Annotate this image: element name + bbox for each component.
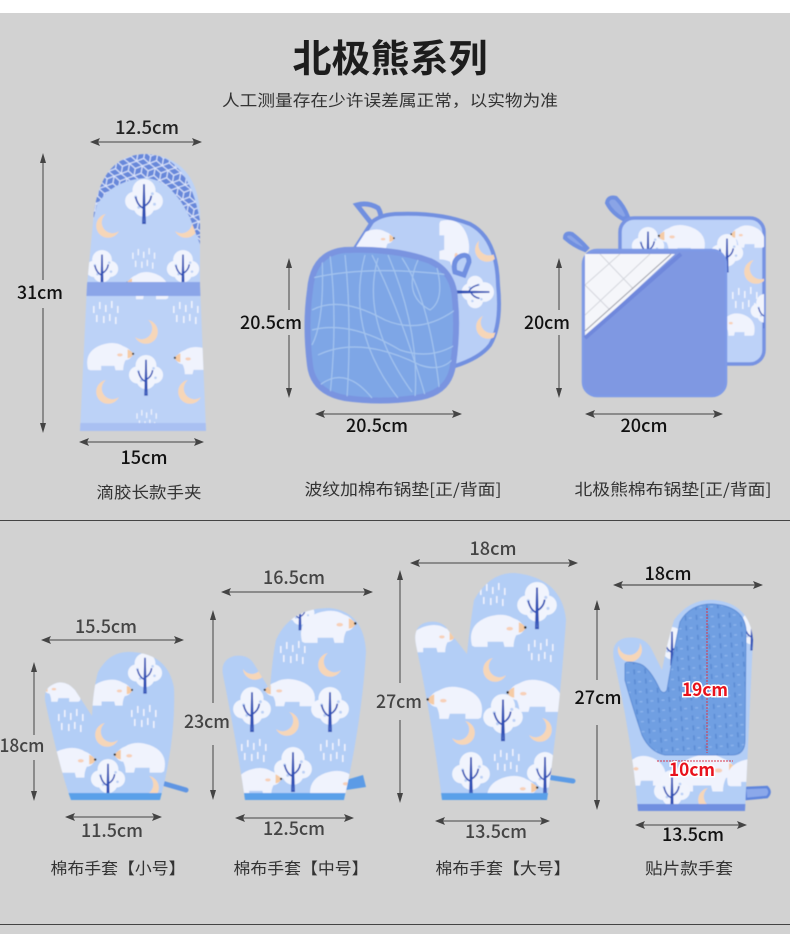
dimension: large glove height: 27cm — [376, 688, 422, 714]
icon: medium glove loop — [346, 775, 366, 790]
icon: back cotton potholder — [607, 198, 779, 364]
dimension: long mitt bottom width: 15cm — [120, 444, 168, 470]
panel: long oven mitt — [80, 153, 206, 432]
dimension: medium glove height — [184, 610, 230, 800]
dimension: patch glove height: 27cm — [574, 684, 622, 710]
dimension: wave pad height — [240, 258, 302, 398]
dimension: medium glove bottom width — [236, 815, 353, 841]
dimension: cotton pad width: 20cm — [620, 412, 668, 438]
dimension: small glove bottom width — [66, 817, 161, 843]
dimension: wave pad width: 20.5cm — [346, 412, 408, 438]
panel: wave potholders — [308, 204, 502, 400]
dimension: cotton pad height: 20cm — [524, 309, 570, 335]
panel: large glove — [408, 570, 573, 806]
panel: small glove — [40, 648, 186, 804]
caption: wave pad: 波纹加棉布锅垫[正/背面] — [304, 476, 502, 500]
label: 10cm red: 10cm — [669, 756, 715, 782]
divider line middle — [0, 520, 790, 521]
dimension: patch glove bottom width — [636, 821, 746, 847]
dimension: medium glove bottom width: 12.5cm — [263, 815, 325, 841]
dimension: long mitt bottom width — [80, 442, 203, 470]
icon: front silicone potholder — [308, 250, 456, 400]
dimension: large glove height — [376, 570, 422, 803]
subtitle note: 人工测量存在少许误差属正常，以实物为准 — [222, 87, 558, 111]
icon: large glove body — [414, 572, 566, 801]
icon: patch glove loop — [745, 787, 770, 799]
measurement lines: silicone grip — [657, 608, 733, 761]
caption: cotton pad: 北极熊棉布锅垫[正/背面] — [574, 476, 772, 500]
dimension: cotton pad width — [586, 412, 722, 438]
dimension: patch glove height — [574, 600, 622, 810]
icon: front cotton potholder with pocket — [565, 234, 726, 396]
dimension: long mitt height — [17, 153, 63, 433]
caption: medium glove: 棉布手套【中号】 — [234, 855, 368, 879]
dimension: medium glove height: 23cm — [184, 708, 230, 734]
caption: long mitt: 滴胶长款手夹 — [96, 479, 202, 503]
icon: small glove body — [44, 652, 174, 801]
title: 北极熊系列 — [292, 28, 488, 83]
icon: silicone grip — [625, 604, 746, 755]
dimension: patch glove top width: 18cm — [644, 560, 692, 586]
dimension: small glove top width: 15.5cm — [75, 613, 137, 639]
dimension: large glove top width: 18cm — [470, 535, 516, 561]
icon: back potholder with fabric print — [350, 204, 502, 366]
panel: medium glove — [222, 608, 366, 801]
dimension: wave pad height: 20.5cm — [240, 309, 302, 335]
dimension: large glove bottom width — [436, 818, 549, 844]
dimension: large glove bottom width: 13.5cm — [465, 818, 527, 844]
dimension: small glove height: 18cm — [0, 732, 44, 758]
dimension: long mitt top width: 12.5cm — [115, 114, 179, 140]
dimension: long mitt height: 31cm — [17, 279, 63, 305]
icon: medium glove body — [222, 608, 366, 801]
caption: large glove: 棉布手套【大号】 — [436, 855, 570, 879]
panel: patch glove — [608, 596, 774, 816]
icon: long mitt body — [80, 153, 206, 432]
dimension: cotton pad height — [524, 258, 570, 398]
dimension: long mitt top width — [91, 114, 201, 142]
label: 19cm red: 19cm — [682, 676, 728, 702]
dimension: small glove height — [0, 662, 44, 801]
icon: hanging loop — [454, 255, 469, 275]
divider line bottom — [0, 924, 790, 925]
dimension: small glove bottom width: 11.5cm — [81, 817, 143, 843]
dimension: medium glove top width: 16.5cm — [263, 564, 325, 590]
dimension: patch glove bottom width: 13.5cm — [662, 821, 724, 847]
icon: patch glove body — [612, 600, 754, 812]
icon: small glove loop — [162, 783, 186, 790]
panel: polar bear potholders — [565, 198, 779, 396]
caption: patch glove: 贴片款手套 — [645, 855, 733, 879]
caption: small glove: 棉布手套【小号】 — [50, 855, 186, 879]
icon: large glove loop — [547, 777, 573, 781]
